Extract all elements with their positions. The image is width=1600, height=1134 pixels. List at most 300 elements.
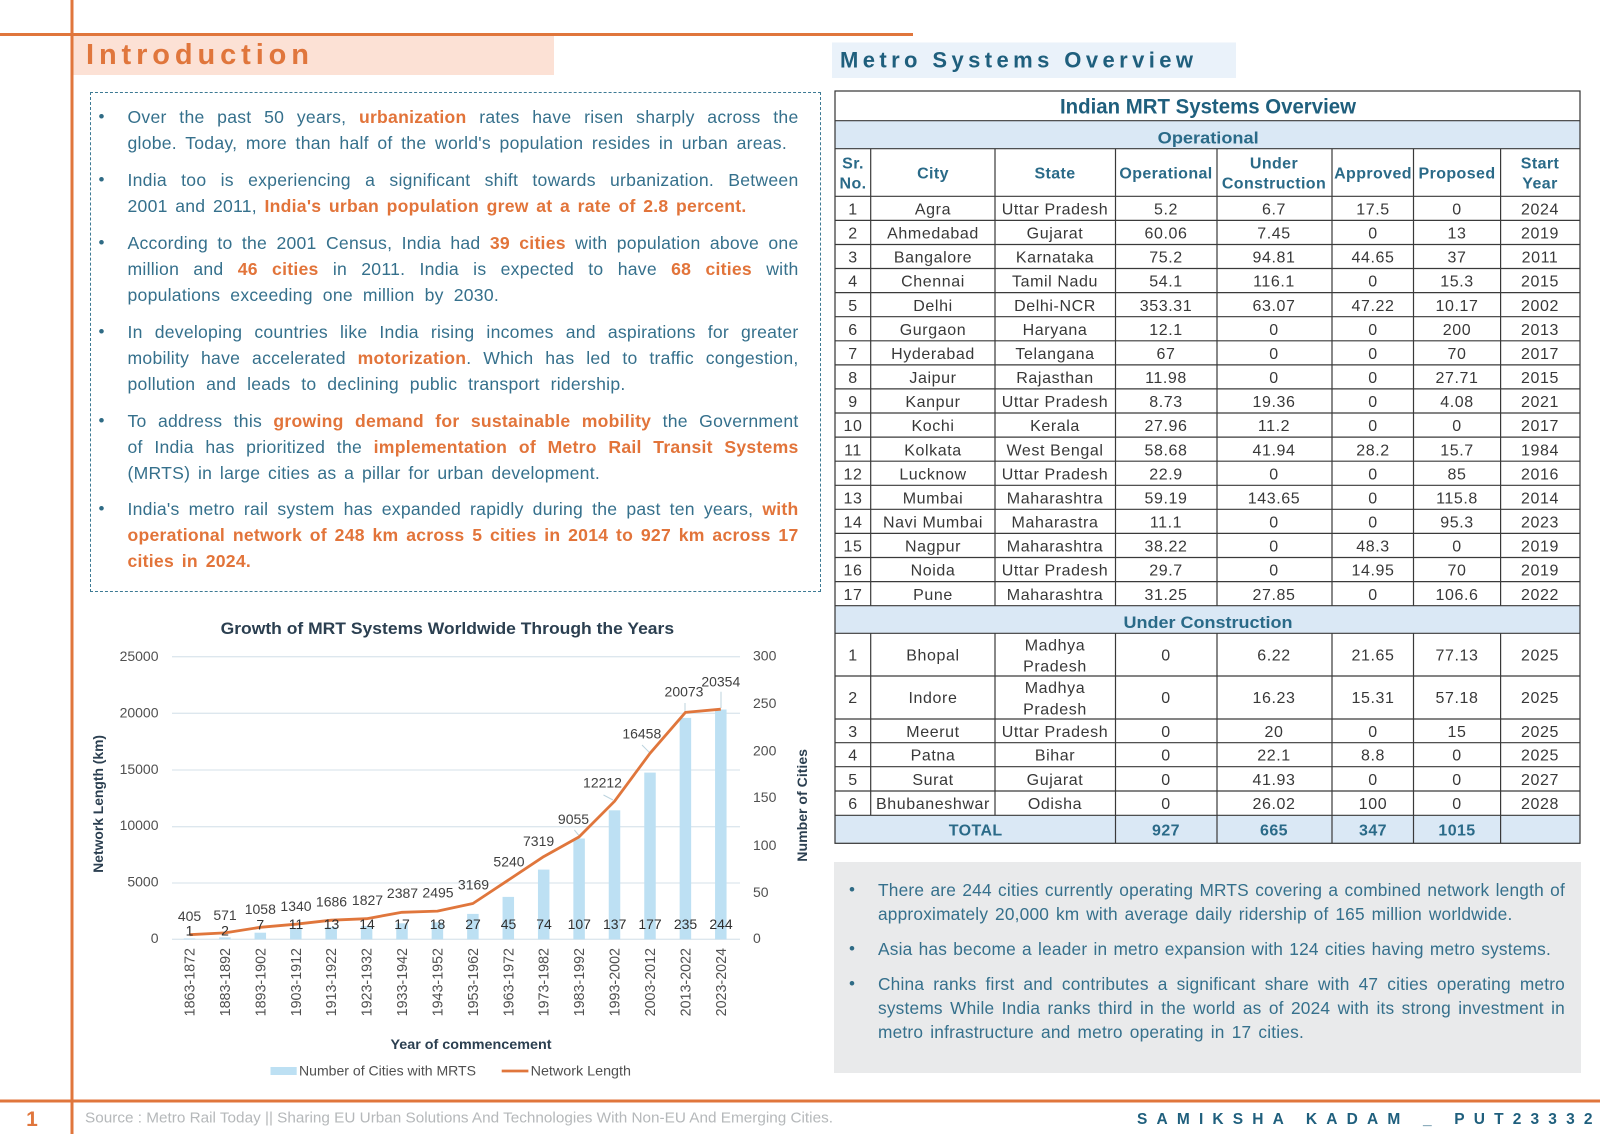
operational rows: Mumbai: [903, 490, 963, 508]
operational rows: Delhi: [913, 298, 953, 315]
bullet: network expansion: operational network of 248 km across 5 cities in 2014 to 927 km across 17: [128, 524, 798, 544]
operational rows: 31.25: [1144, 587, 1188, 604]
operational rows: 0: [1452, 418, 1462, 435]
under construction rows: 2: [848, 690, 858, 707]
bullet: China and India: [851, 972, 1571, 1044]
number of cities data labels: 74: [536, 916, 552, 932]
under construction rows: Bihar: [1035, 748, 1075, 764]
under construction rows: 0: [1161, 748, 1171, 764]
number of cities data labels: [186, 916, 733, 939]
operational rows: 5.2: [1154, 202, 1178, 218]
operational rows: 2: [848, 226, 858, 243]
number of cities data labels: 177: [638, 916, 662, 932]
bullet: India urban shift: 2001 and 2011, India's urban population grew at a rate of 2.8 percent.: [128, 196, 746, 216]
network length data labels: 12212: [583, 775, 622, 791]
operational rows: Lucknow: [899, 466, 967, 483]
table title: Indian MRT Systems Overview: [1060, 96, 1357, 118]
operational rows: Telangana: [1015, 346, 1095, 363]
operational rows: 0: [1269, 514, 1279, 532]
page number: 1: [26, 1108, 38, 1131]
under construction rows: Madhya: [1025, 680, 1085, 697]
operational rows: 2023: [1521, 514, 1559, 532]
bullet: India urban shift: [100, 167, 798, 219]
under construction rows: 15.31: [1351, 690, 1395, 707]
operational rows: Maharashtra: [1007, 539, 1103, 556]
under construction rows: Indore: [909, 690, 957, 707]
operational rows: 1984: [1521, 442, 1559, 459]
operational rows: 2011: [1522, 250, 1558, 267]
operational rows: 0: [1368, 587, 1378, 604]
header row: Sr.: [842, 156, 864, 172]
bullet: sustainable mobility: To address this growing demand for sustainable mobility the Government: [128, 410, 798, 430]
operational rows: Karnataka: [1016, 250, 1094, 267]
bullet: motorization: [100, 319, 798, 397]
operational rows: 106.6: [1435, 587, 1479, 604]
under construction rows: Patna: [911, 748, 955, 764]
operational rows: 11: [844, 442, 862, 459]
x axis category labels: 2003-2012: [643, 948, 659, 1016]
under construction rows: 0: [1161, 690, 1171, 707]
number of cities data labels: 107: [568, 916, 591, 932]
under construction rows: 2025: [1521, 690, 1559, 707]
x axis category labels: [182, 948, 730, 1016]
under construction rows: 22.1: [1257, 748, 1291, 764]
operational rows: 41.94: [1252, 442, 1296, 459]
operational rows: 10.17: [1435, 298, 1479, 315]
operational rows: 2017: [1521, 346, 1559, 363]
operational rows: 29.7: [1149, 563, 1183, 580]
under construction rows: [848, 638, 1559, 813]
operational rows: 2024: [1521, 202, 1559, 218]
left axis title: Network Length (km): [91, 735, 106, 873]
bullet: network expansion: [100, 496, 798, 574]
network length data labels: 20354: [701, 674, 740, 690]
operational rows: Gurgaon: [900, 322, 966, 339]
number of cities data labels: 11: [289, 916, 303, 932]
x axis category labels: 1913-1922: [324, 948, 340, 1016]
bullet: motorization: mobility have accelerated motorization. Which has led to traffic congestion,: [128, 348, 798, 368]
operational rows: 15.3: [1440, 274, 1474, 291]
operational rows: Hyderabad: [891, 346, 975, 363]
legend: Number of Cities with MRTS: [299, 1062, 476, 1078]
bullet: million-plus cities: According to the 2001 Census, India had 39 cities with population above one: [128, 233, 798, 253]
operational rows: 0: [1368, 322, 1378, 339]
operational rows: 12.1: [1149, 322, 1183, 339]
under construction rows: 0: [1161, 724, 1171, 741]
operational rows: 38.22: [1144, 539, 1188, 556]
left axis labels: 10000: [120, 817, 159, 833]
operational rows: Tamil Nadu: [1012, 274, 1098, 291]
number of cities data labels: 244: [709, 916, 733, 932]
source note: Source : Metro Rail Today || Sharing EU Urban Solutions And Technologies With Non-EU And Emerging Cities.: [85, 1110, 833, 1126]
x axis category labels: 1943-1952: [430, 948, 446, 1016]
under construction rows: 5: [848, 772, 858, 789]
operational rows: 0: [1452, 539, 1462, 556]
header row: Under: [1250, 156, 1298, 172]
operational rows: 13: [844, 490, 862, 508]
operational rows: 0: [1269, 346, 1279, 363]
operational rows: 10: [844, 418, 862, 435]
operational rows: 12: [844, 466, 862, 483]
operational rows: 11.98: [1145, 370, 1187, 387]
operational rows: Maharashtra: [1007, 587, 1103, 604]
network length data labels: 1827: [352, 892, 383, 908]
bullet: China and India: China ranks first and contributes a significant share with 47 cities operating metro: [878, 974, 1565, 994]
under construction rows: Pradesh: [1023, 658, 1087, 676]
under construction rows: Pradesh: [1023, 702, 1087, 718]
under construction rows: 2025: [1521, 648, 1559, 664]
under construction rows: Bhubaneshwar: [876, 796, 990, 813]
operational rows: Kanpur: [905, 394, 961, 411]
operational rows: Ahmedabad: [887, 226, 979, 243]
header row: No.: [840, 176, 866, 192]
under construction rows: 4: [848, 748, 858, 764]
operational rows: 0: [1452, 202, 1462, 218]
operational rows: Gujarat: [1027, 226, 1083, 243]
operational rows: 2017: [1521, 418, 1559, 435]
under construction rows: Surat: [912, 772, 954, 789]
operational rows: West Bengal: [1006, 442, 1104, 459]
operational rows: 15.7: [1440, 442, 1474, 459]
operational rows: Agra: [915, 202, 951, 218]
operational rows: 7.45: [1257, 226, 1291, 243]
operational rows: 59.19: [1144, 490, 1188, 508]
operational rows: 353.31: [1140, 298, 1192, 315]
x axis category labels: 1993-2002: [608, 948, 624, 1016]
legend: Network Length: [531, 1062, 631, 1078]
right axis labels: 0: [753, 930, 761, 946]
number of cities data labels: 2: [221, 923, 229, 939]
table: Indian MRT Systems Overview: [835, 91, 1580, 843]
under construction rows: 0: [1452, 772, 1462, 789]
under construction rows: 3: [848, 724, 858, 741]
bullet: million-plus cities: million and 46 cities in 2011. India is expected to have 68 cities with: [128, 259, 798, 279]
x axis category labels: 1903-1912: [289, 948, 305, 1016]
operational rows: 16: [844, 563, 862, 580]
operational rows: 14: [844, 514, 862, 532]
operational rows: 4.08: [1440, 394, 1474, 411]
operational rows: 0: [1368, 418, 1378, 435]
operational rows: Uttar Pradesh: [1002, 563, 1108, 580]
operational rows: Chennai: [901, 274, 965, 291]
operational rows: Maharastra: [1012, 514, 1098, 532]
section band: Metro Systems Overview: [832, 42, 1236, 78]
header row: Operational: [1119, 166, 1213, 182]
number of cities data labels: 137: [603, 916, 627, 932]
network length data labels: 1058: [245, 901, 276, 917]
left axis labels: 0: [151, 930, 159, 946]
network length data labels: 9055: [558, 811, 589, 827]
chart title: Growth of MRT Systems Worldwide Through the Years: [221, 620, 674, 638]
author credit: SAMIKSHA KADAM _ PUT23332: [1137, 1111, 1592, 1128]
bullet: China and India: systems While India ranks third in the world as of 2024 with its strong investment in: [878, 998, 1565, 1018]
operational rows: 5: [848, 298, 858, 315]
leader lines: [574, 692, 721, 836]
left axis labels: 25000: [120, 648, 159, 664]
under construction rows: 2027: [1521, 772, 1559, 789]
band: Under Construction: Under Construction: [1124, 614, 1292, 632]
operational rows: 1: [848, 202, 858, 218]
right axis labels: 300: [753, 648, 777, 664]
total row: 665: [1260, 822, 1288, 840]
under construction rows: 15: [1448, 724, 1466, 741]
right axis labels: 50: [753, 884, 769, 900]
right axis labels: 200: [753, 742, 777, 758]
under construction rows: 0: [1452, 796, 1462, 813]
operational rows: 0: [1368, 274, 1378, 291]
operational rows: 115.8: [1436, 490, 1478, 508]
operational rows: Haryana: [1023, 322, 1087, 339]
right axis title: Number of Cities: [795, 749, 810, 862]
under construction rows: 8.8: [1361, 748, 1385, 764]
under construction rows: 2025: [1521, 724, 1559, 741]
number of cities data labels: 27: [465, 916, 481, 932]
bullet: motorization: pollution and leads to declining public transport ridership.: [128, 374, 626, 394]
operational rows: 6.7: [1262, 202, 1286, 218]
operational rows: 37: [1448, 250, 1466, 267]
operational rows: 0: [1269, 563, 1279, 580]
total row: 347: [1359, 822, 1387, 840]
operational rows: Jaipur: [909, 370, 957, 387]
bullet: India urban shift: India too is experiencing a significant shift towards urbanization. Between: [128, 170, 798, 190]
bullet: urbanization: globe. Today, more than half of the world's population resides in urban areas.: [128, 133, 787, 153]
operational rows: 17: [844, 587, 862, 604]
header row: [840, 156, 1559, 192]
under construction rows: 21.65: [1351, 648, 1395, 664]
operational rows: 19.36: [1252, 394, 1296, 411]
operational rows: 8.73: [1149, 394, 1183, 411]
section band: Introduction: Introduction: [86, 39, 309, 71]
operational rows: 2014: [1521, 490, 1559, 508]
panel: worldwide facts: [834, 862, 1581, 1073]
operational rows: 27.71: [1435, 370, 1479, 387]
bullet: network expansion: cities in 2024.: [128, 550, 251, 570]
operational rows: 94.81: [1252, 250, 1296, 267]
number of cities data labels: 18: [430, 916, 445, 932]
header row: City: [917, 166, 949, 182]
operational rows: [844, 202, 1559, 604]
x axis category labels: 1933-1942: [395, 948, 411, 1016]
under construction rows: 2028: [1521, 796, 1559, 813]
under construction rows: 0: [1161, 772, 1171, 789]
right axis labels: [753, 648, 777, 946]
bullet: China and India: metro infrastructure and metro operating in 17 cities.: [878, 1022, 1304, 1042]
right axis labels: 250: [753, 695, 777, 711]
under construction rows: 100: [1359, 796, 1387, 813]
bullet: million-plus cities: [100, 230, 798, 308]
operational rows: 48.3: [1356, 539, 1390, 556]
section band: Introduction: [73, 35, 554, 75]
operational rows: 17.5: [1356, 202, 1390, 218]
bullet: network expansion: India's metro rail system has expanded rapidly during the past ten years, with: [128, 498, 798, 518]
operational rows: Kerala: [1030, 418, 1080, 435]
operational rows: 11.1: [1150, 514, 1182, 532]
operational rows: 67: [1156, 346, 1176, 363]
operational rows: Kolkata: [904, 442, 962, 459]
operational rows: Rajasthan: [1016, 370, 1094, 387]
number of cities data labels: 13: [324, 916, 339, 932]
operational rows: 22.9: [1149, 466, 1183, 483]
operational rows: 44.65: [1351, 250, 1395, 267]
bullet: 244 cities: [851, 878, 1571, 926]
total row: [949, 822, 1476, 840]
network length data labels: 1686: [316, 894, 347, 910]
x axis category labels: 2023-2024: [714, 948, 730, 1016]
bullet: sustainable mobility: (MRTS) in large cities as a pillar for urban development.: [128, 462, 600, 482]
network length data labels: 1340: [280, 898, 312, 914]
legend: [270, 1062, 631, 1078]
left axis labels: 15000: [120, 761, 159, 777]
x axis category labels: 1863-1872: [182, 948, 198, 1016]
operational rows: 116.1: [1253, 274, 1295, 291]
operational rows: 13: [1448, 226, 1466, 243]
operational rows: 8: [848, 370, 858, 387]
operational rows: 63.07: [1252, 298, 1296, 315]
chart: Growth of MRT Systems Worldwide: [91, 620, 810, 1078]
x axis category labels: 1983-1992: [572, 948, 588, 1016]
under construction rows: 0: [1161, 796, 1171, 813]
operational rows: 4: [848, 274, 858, 291]
operational rows: 2022: [1521, 587, 1559, 604]
section band: Metro Systems Overview: Metro Systems Overview: [840, 48, 1194, 73]
operational rows: Navi Mumbai: [883, 514, 983, 532]
operational rows: 60.06: [1144, 226, 1188, 243]
operational rows: 0: [1368, 514, 1378, 532]
operational rows: 2016: [1521, 466, 1559, 483]
under construction rows: 0: [1452, 748, 1462, 764]
operational rows: 0: [1269, 322, 1279, 339]
under construction rows: 41.93: [1252, 772, 1296, 789]
bullet: sustainable mobility: of India has prioritized the implementation of Metro Rail Transit Systems: [128, 436, 799, 456]
operational rows: 0: [1368, 490, 1378, 508]
operational rows: 2019: [1521, 539, 1559, 556]
operational rows: 3: [848, 250, 858, 267]
network length data labels: 2495: [422, 884, 454, 900]
operational rows: 0: [1269, 370, 1279, 387]
under construction rows: 1: [848, 648, 858, 664]
header row: State: [1034, 166, 1076, 182]
total row: 927: [1152, 822, 1180, 840]
x axis title: Year of commencement: [390, 1037, 552, 1052]
x axis category labels: 1883-1892: [218, 948, 234, 1016]
network length data labels: 5240: [493, 854, 525, 870]
bars: number of cities with MRTS: [184, 710, 727, 939]
operational rows: Uttar Pradesh: [1002, 466, 1108, 483]
operational rows: 2019: [1521, 226, 1559, 243]
total row: TOTAL: [949, 822, 1003, 840]
operational rows: 75.2: [1149, 250, 1183, 267]
network length data labels: 16458: [622, 725, 661, 741]
bullet: 244 cities: approximately 20,000 km with average daily ridership of 165 million worldwide.: [878, 904, 1512, 924]
header row: Construction: [1222, 176, 1326, 192]
operational rows: Noida: [911, 563, 955, 580]
line: network length: [190, 709, 721, 935]
bullet: motorization: In developing countries like India rising incomes and aspirations for greater: [128, 322, 798, 342]
header row: Proposed: [1418, 166, 1496, 182]
operational rows: 2021: [1521, 394, 1559, 411]
operational rows: 95.3: [1440, 514, 1474, 532]
left axis labels: [120, 648, 159, 946]
operational rows: 2015: [1521, 370, 1559, 387]
under construction rows: Meerut: [906, 724, 960, 741]
right axis labels: 100: [753, 837, 777, 853]
under construction rows: 57.18: [1435, 690, 1479, 707]
right axis labels: 150: [753, 789, 777, 805]
bullet: million-plus cities: populations exceeding one million by 2030.: [128, 285, 499, 305]
operational rows: 0: [1269, 466, 1279, 483]
total row: 1015: [1438, 822, 1476, 840]
operational rows: Nagpur: [905, 539, 961, 556]
number of cities data labels: 14: [359, 916, 375, 932]
under construction rows: Bhopal: [906, 648, 960, 664]
operational rows: 28.2: [1356, 442, 1390, 459]
under construction rows: 20: [1264, 724, 1284, 741]
under construction rows: 2025: [1521, 748, 1559, 764]
bullet: 244 cities: There are 244 cities currently operating MRTS covering a combined network length of: [878, 880, 1565, 900]
operational rows: 143.65: [1248, 490, 1300, 508]
network length data labels: 7319: [523, 833, 554, 849]
under construction rows: 0: [1161, 648, 1171, 664]
under construction rows: 0: [1368, 724, 1378, 741]
header row: Start: [1521, 156, 1559, 172]
left axis labels: 5000: [127, 874, 159, 890]
operational rows: 11.2: [1258, 418, 1290, 435]
operational rows: 0: [1269, 539, 1279, 556]
network length data labels: 3169: [458, 876, 489, 892]
under construction rows: Odisha: [1028, 796, 1082, 813]
operational rows: 0: [1368, 346, 1378, 363]
under construction rows: 6.22: [1257, 648, 1291, 664]
under construction rows: Madhya: [1025, 638, 1085, 654]
operational rows: 0: [1368, 370, 1378, 387]
x axis category labels: 1963-1972: [501, 948, 517, 1016]
bullet: urbanization: [100, 104, 798, 156]
under construction rows: 0: [1368, 772, 1378, 789]
number of cities data labels: 7: [256, 916, 264, 932]
operational rows: 85: [1448, 466, 1466, 483]
operational rows: 2013: [1521, 322, 1559, 339]
operational rows: 70: [1448, 346, 1466, 363]
x axis category labels: 2013-2022: [678, 948, 694, 1016]
network length data labels: 20073: [665, 684, 704, 700]
header row: Approved: [1334, 166, 1412, 182]
operational rows: 15: [844, 539, 862, 556]
operational rows: Maharashtra: [1007, 490, 1103, 508]
operational rows: 7: [848, 346, 858, 363]
bullet: sustainable mobility: [100, 408, 798, 486]
operational rows: Kochi: [911, 418, 955, 435]
network length data labels: 405: [178, 908, 201, 924]
number of cities data labels: 45: [501, 916, 516, 932]
network length data labels: [178, 674, 740, 924]
band: Operational: Operational: [1158, 130, 1259, 148]
under construction rows: 6: [848, 796, 858, 813]
operational rows: 0: [1368, 466, 1378, 483]
operational rows: Delhi-NCR: [1014, 298, 1096, 315]
header row: Year: [1522, 176, 1558, 192]
number of cities data labels: 235: [674, 916, 697, 932]
under construction rows: 16.23: [1252, 690, 1296, 707]
x axis category labels: 1953-1962: [466, 948, 482, 1016]
operational rows: 9: [848, 394, 858, 411]
operational rows: 58.68: [1144, 442, 1188, 459]
panel: introduction text: [90, 92, 820, 592]
under construction rows: Gujarat: [1027, 772, 1083, 789]
x axis category labels: 1973-1982: [537, 948, 553, 1016]
operational rows: Uttar Pradesh: [1002, 202, 1108, 218]
operational rows: 27.96: [1144, 418, 1188, 435]
left axis labels: 20000: [120, 704, 159, 720]
